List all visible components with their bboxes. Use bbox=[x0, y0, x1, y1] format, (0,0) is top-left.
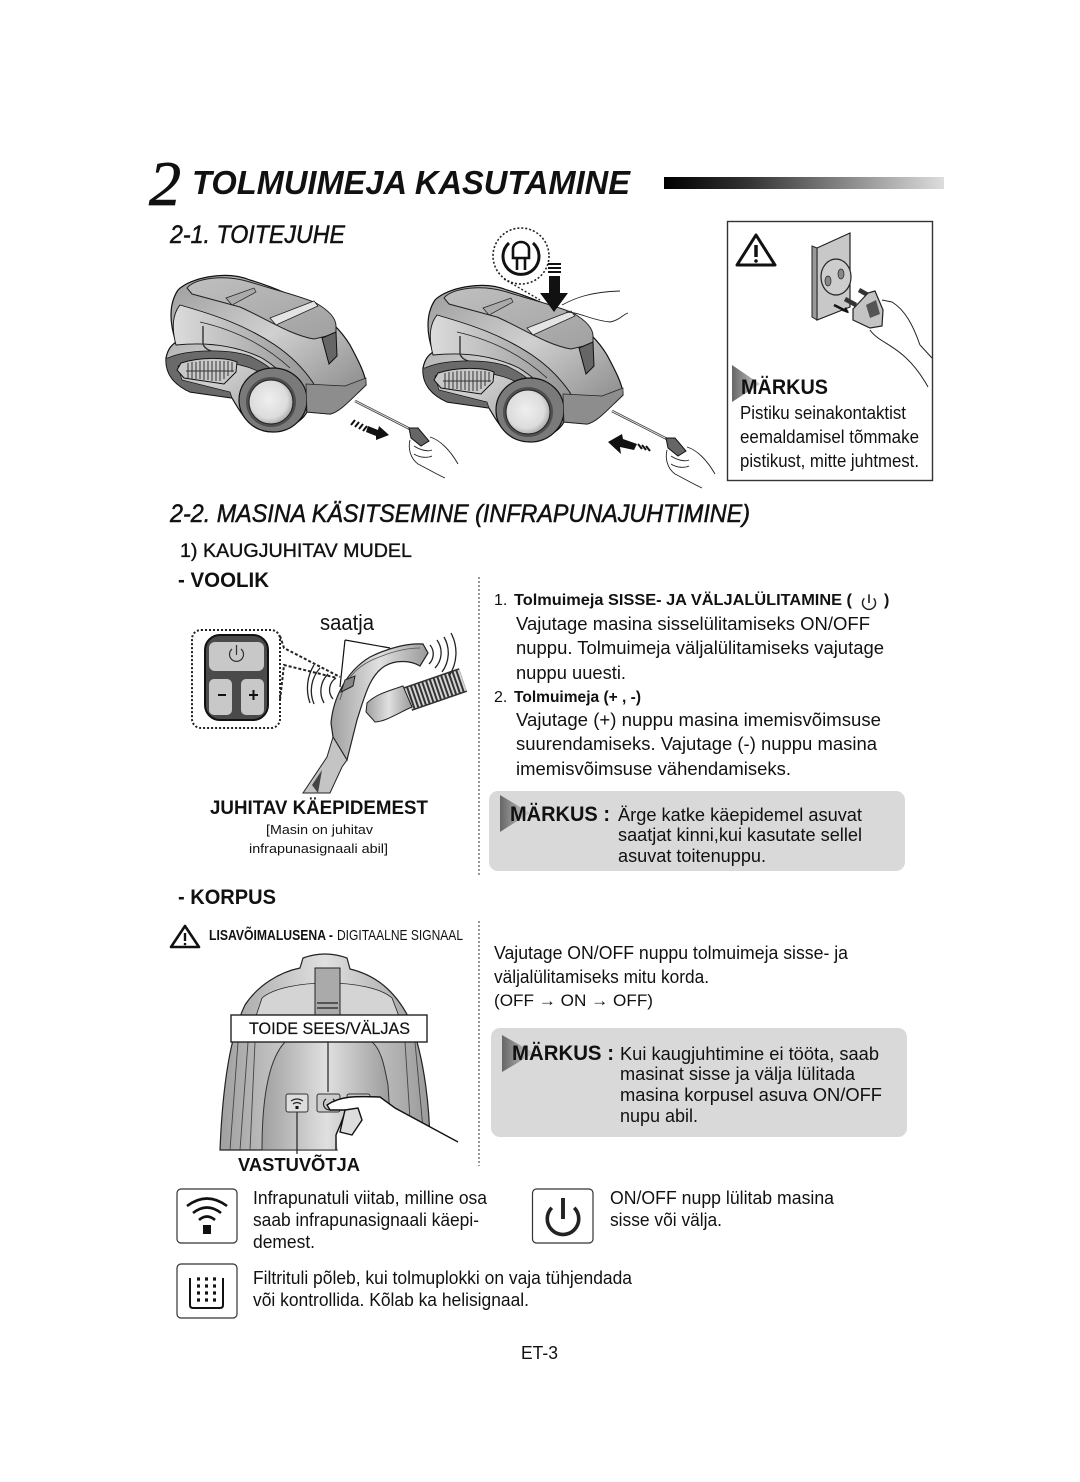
instructions: hose: Tolmuimeja SISSE- JA VÄLJALÜLITAMINE ( bbox=[514, 590, 853, 609]
text: on/off button: sisse või välja. bbox=[610, 1210, 722, 1230]
text: filter light bbox=[253, 1268, 633, 1310]
text: on/off button: ON/OFF nupp lülitab masina bbox=[610, 1188, 835, 1208]
note text: Pistiku seinakontaktist bbox=[740, 403, 906, 423]
instructions: body: väljalülitamiseks mitu korda. bbox=[494, 967, 709, 987]
instructions: hose: 1. bbox=[494, 592, 507, 609]
text: infrared light bbox=[253, 1188, 488, 1252]
icon: power button bbox=[532, 1189, 593, 1243]
text: infrared light: demest. bbox=[253, 1232, 315, 1252]
title gradient bar bbox=[664, 177, 944, 189]
text: infrared light: saab infrapunasignaali käepi- bbox=[253, 1210, 479, 1230]
optional feature label bbox=[209, 926, 463, 944]
illustration: remote control buttons bbox=[192, 630, 340, 728]
illustration: vacuum body with control buttons bbox=[220, 954, 458, 1154]
column divider lower bbox=[478, 921, 480, 1166]
section heading 2-1: 2-1. TOITEJUHE bbox=[169, 221, 345, 249]
illustration: plug pulled from wall socket bbox=[812, 233, 932, 387]
instructions: hose: nuppu. Tolmuimeja väljalülitamiseks vajutage bbox=[516, 638, 884, 658]
callout: body note: masinat sisse ja välja lülitada bbox=[620, 1064, 856, 1084]
instructions: hose: Tolmuimeja (+ , -) bbox=[514, 689, 641, 706]
callout: body note: MÄRKUS : bbox=[512, 1042, 614, 1065]
label: power on/off: TOIDE SEES/VÄLJAS bbox=[249, 1019, 410, 1038]
callout: body note: nupu abil. bbox=[620, 1106, 698, 1126]
page number: ET-3 bbox=[521, 1343, 558, 1363]
instructions: hose: Vajutage masina sisselülitamiseks ON/OFF bbox=[516, 614, 870, 634]
callout: body note: Kui kaugjuhtimine ei tööta, saab bbox=[620, 1044, 879, 1064]
subheading: remote model: 1) KAUGJUHITAV MUDEL bbox=[180, 541, 412, 562]
callout: body note: masina korpusel asuva ON/OFF bbox=[620, 1085, 882, 1105]
callout: hose note: Ärge katke käepidemel asuvat bbox=[618, 805, 862, 825]
instructions: hose: suurendamiseks. Vajutage (-) nuppu masina bbox=[516, 734, 878, 754]
text: filter light: Filtrituli põleb, kui tolmuplokki on vaja tühjendada bbox=[253, 1268, 633, 1288]
instructions: hose: Vajutage (+) nuppu masina imemisvõimsuse bbox=[516, 710, 881, 730]
icon: infrared signal bbox=[177, 1189, 237, 1243]
optional feature label: DIGITAALNE SIGNAAL bbox=[337, 927, 463, 944]
instructions: hose bbox=[494, 590, 889, 779]
note text: eemaldamisel tõmmake bbox=[740, 427, 919, 447]
caption: handle: [Masin on juhitav bbox=[266, 822, 374, 837]
label: transmitter: saatja bbox=[320, 610, 375, 635]
optional feature label: LISAVÕIMALUSENA - bbox=[209, 926, 333, 944]
note text bbox=[740, 403, 919, 471]
illustration: vacuum cleaner cord rewind with button bbox=[423, 228, 715, 488]
illustration: vacuum cleaner cord pull bbox=[166, 275, 458, 478]
callout: hose note bbox=[489, 791, 905, 871]
title: TOLMUIMEJA KASUTAMINE bbox=[192, 164, 631, 201]
subheading: hose: - VOOLIK bbox=[178, 569, 269, 592]
note heading: MÄRKUS bbox=[741, 376, 828, 399]
label: receiver: VASTUVÕTJA bbox=[238, 1154, 360, 1175]
instructions: hose: 2. bbox=[494, 689, 507, 706]
instructions: body: Vajutage ON/OFF nuppu tolmuimeja sisse- ja bbox=[494, 943, 849, 963]
callout: hose note: MÄRKUS : bbox=[510, 803, 610, 826]
icon: warning triangle bbox=[737, 235, 775, 265]
text: on/off button bbox=[610, 1188, 835, 1230]
instructions: hose: ) bbox=[884, 592, 889, 609]
label: power on/off bbox=[231, 1015, 427, 1042]
callout: body note bbox=[491, 1028, 907, 1137]
column divider upper bbox=[478, 577, 480, 876]
instructions: hose: imemisvõimsuse vähendamiseks. bbox=[516, 759, 791, 779]
text: filter light: või kontrollida. Kõlab ka helisignaal. bbox=[253, 1290, 529, 1310]
instructions: body: (OFF → ON → OFF) bbox=[494, 991, 653, 1010]
section heading 2-2: 2-2. MASINA KÄSITSEMINE (INFRAPUNAJUHTIMINE) bbox=[169, 500, 750, 528]
icon: warning triangle small bbox=[171, 926, 199, 947]
caption: handle: infrapunasignaali abil] bbox=[249, 841, 388, 856]
note marker triangle bbox=[732, 365, 760, 402]
icon: filter indicator bbox=[177, 1264, 237, 1318]
note text: pistikust, mitte juhtmest. bbox=[740, 451, 919, 471]
callout: hose note: asuvat toitenuppu. bbox=[618, 846, 766, 866]
subheading: body: - KORPUS bbox=[178, 886, 276, 909]
instructions: hose: nuppu uuesti. bbox=[516, 663, 626, 683]
instructions: body bbox=[494, 943, 849, 1010]
title number: 2 bbox=[149, 148, 181, 219]
callout: hose note: saatjat kinni,kui kasutate sellel bbox=[618, 825, 862, 845]
panel: caution note bbox=[728, 222, 932, 480]
caption: handle bbox=[249, 822, 388, 856]
text: infrared light: Infrapunatuli viitab, milline osa bbox=[253, 1188, 488, 1208]
illustration: hose handle bbox=[303, 633, 463, 793]
heading: controlled from handle: JUHITAV KÄEPIDEMEST bbox=[210, 798, 428, 819]
